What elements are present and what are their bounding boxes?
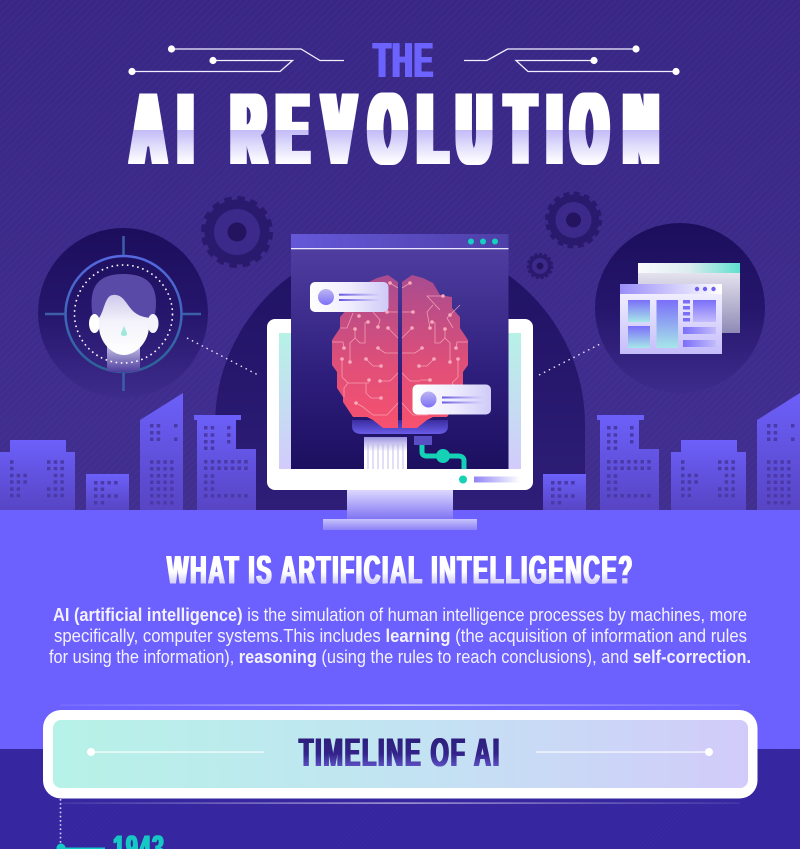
teal cable <box>422 445 464 469</box>
chat card: lower right <box>412 384 491 414</box>
icon: face recognition <box>38 228 208 398</box>
title: AI REVOLUTION: AI REVOLUTION <box>132 74 657 185</box>
building 4 <box>194 415 256 510</box>
building 6 <box>597 415 659 510</box>
timeline entry: 1943 <box>56 829 165 849</box>
banner line right <box>536 748 713 756</box>
timeline dotted spine <box>60 799 62 846</box>
purple section background <box>0 510 800 749</box>
dark arch behind monitor <box>215 240 585 511</box>
title: THE: THE <box>374 34 434 88</box>
banner heading: TIMELINE OF AI <box>299 731 501 775</box>
dotted connector: monitor to windows <box>539 338 612 375</box>
paragraph: definition of AI: AI (artificial intelligence) is the simulation of human intelligence processes by machines, more <box>53 605 747 625</box>
banner line left <box>87 748 264 756</box>
icon: medium gear <box>548 194 600 246</box>
status light <box>459 476 467 484</box>
brain base and connectors <box>352 420 464 469</box>
building 5 <box>543 474 586 510</box>
window title bar <box>291 234 508 248</box>
monitor <box>267 319 533 490</box>
chat card: upper left <box>310 282 388 312</box>
building 2 <box>86 474 129 510</box>
circuit decoration: right of title <box>464 45 680 75</box>
icon: large gear <box>204 199 270 265</box>
paragraph: definition of AI: for using the information), reasoning (using the rules to reach conclusions), and self-correction. <box>49 647 751 667</box>
icon: software windows <box>595 223 765 393</box>
building 1 <box>0 440 75 510</box>
window buttons <box>468 238 498 244</box>
background: night sky <box>0 0 800 511</box>
city skyline: right <box>543 393 800 510</box>
icon: small gear <box>528 254 552 278</box>
front window <box>620 284 722 354</box>
paragraph: definition of AI: specifically, computer systems.This includes learning (the acquisition of information and rules <box>54 626 747 646</box>
building 7 <box>671 440 746 510</box>
dotted connector: face to monitor <box>187 338 260 376</box>
status bar <box>474 476 520 482</box>
right hemisphere <box>402 275 468 428</box>
back window <box>638 263 740 333</box>
building 8 <box>757 393 800 510</box>
building 3 <box>140 393 183 510</box>
monitor stand <box>323 490 477 530</box>
dark timeline section background <box>0 749 800 849</box>
timeline banner <box>43 704 758 804</box>
brain illustration <box>332 275 468 428</box>
city skyline: left <box>0 393 256 510</box>
circuit decoration: left of title <box>128 45 344 75</box>
paragraph: definition of AI <box>49 605 751 667</box>
left hemisphere <box>332 275 398 428</box>
app window on screen <box>291 234 508 469</box>
